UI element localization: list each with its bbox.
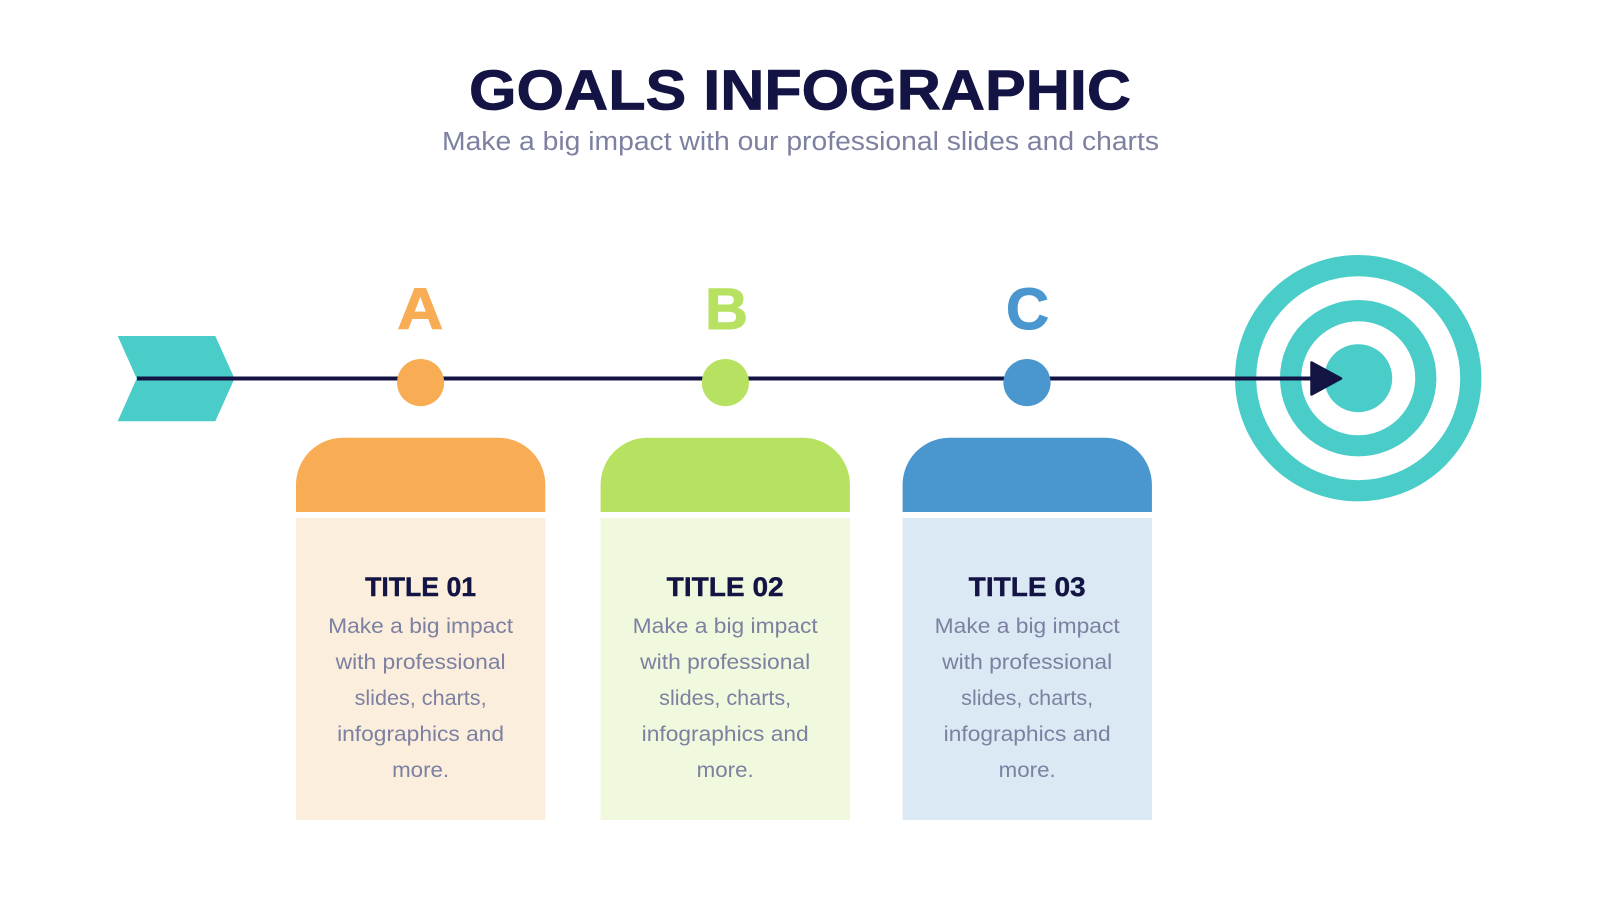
card 01 heading: TITLE 01	[365, 572, 476, 602]
card 02 text: more.	[697, 758, 754, 782]
card 01 text: Make a big impact	[328, 614, 513, 638]
card 02 text: with professional	[639, 650, 810, 674]
card 01 text: slides, charts,	[355, 686, 487, 710]
card 03 tab	[903, 438, 1152, 512]
icon: arrow fletching	[118, 336, 234, 421]
letter A: A	[397, 277, 443, 342]
card 01 text: infographics and	[337, 722, 504, 746]
icon: target	[1246, 266, 1471, 491]
letter C: C	[1006, 277, 1049, 342]
panel: card 01	[296, 438, 545, 820]
card 02 tab	[601, 438, 850, 512]
card 01 tab	[296, 438, 545, 512]
card 02 text: slides, charts,	[659, 686, 791, 710]
card 03 text: Make a big impact	[935, 614, 1120, 638]
marker A	[397, 359, 444, 406]
panel: card 03	[903, 438, 1152, 820]
milestone C	[1003, 277, 1051, 406]
card 02 heading: TITLE 02	[667, 572, 784, 602]
milestone A	[397, 277, 444, 406]
card 02 body	[601, 518, 850, 820]
card 03 text: with professional	[941, 650, 1112, 674]
marker C	[1003, 359, 1051, 406]
card 03 heading: TITLE 03	[969, 572, 1086, 602]
card 03 body	[903, 518, 1152, 820]
subtitle: Make a big impact with our professional slides and charts	[442, 128, 1159, 156]
arrow shaft and head	[137, 362, 1341, 394]
panel: card 02	[601, 438, 850, 820]
card 02 text: Make a big impact	[633, 614, 818, 638]
marker B	[702, 359, 749, 406]
card 01 text: with professional	[335, 650, 506, 674]
title: GOALS INFOGRAPHIC	[469, 58, 1131, 122]
card 03 text: more.	[999, 758, 1056, 782]
letter B: B	[705, 277, 748, 342]
card 01 body	[296, 518, 545, 820]
milestone B	[702, 277, 749, 406]
card 03 text: infographics and	[944, 722, 1111, 746]
card 02 text	[633, 614, 818, 782]
card 01 text	[328, 614, 513, 782]
card 01 text: more.	[392, 758, 449, 782]
card 02 text: infographics and	[642, 722, 809, 746]
card 03 text	[935, 614, 1120, 782]
card 03 text: slides, charts,	[961, 686, 1093, 710]
